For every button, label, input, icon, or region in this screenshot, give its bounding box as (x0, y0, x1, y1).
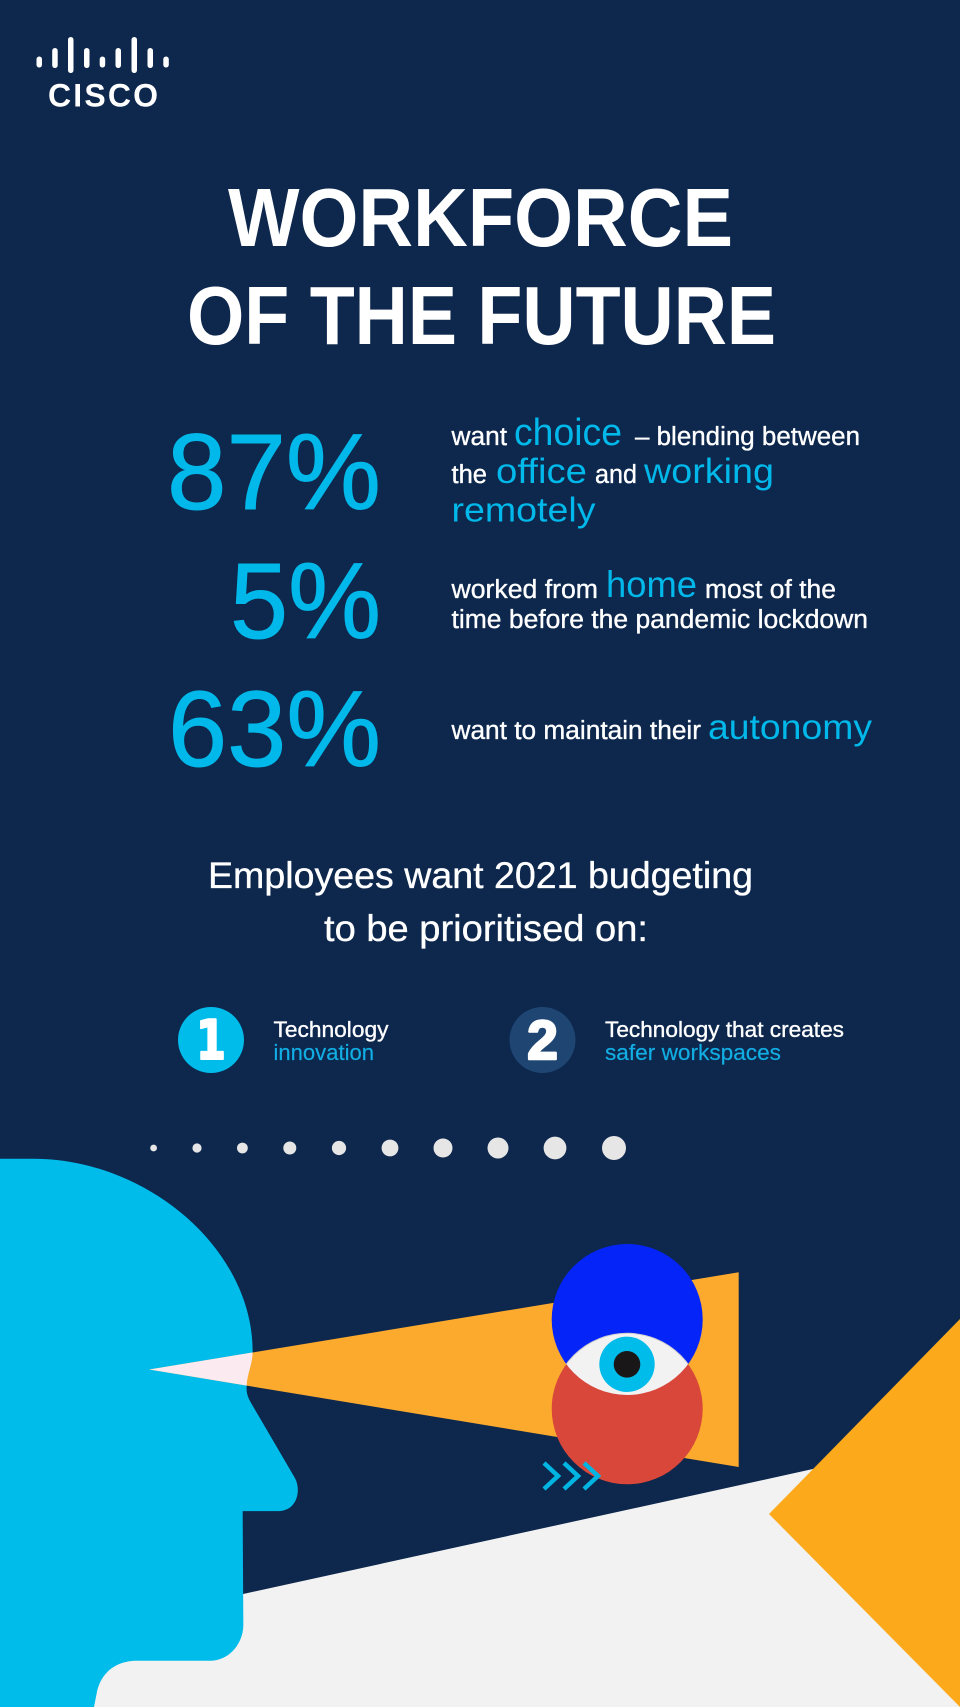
stat text: choice: – blending between (635, 423, 860, 451)
stat text: choice: working (643, 452, 774, 491)
priority 1 text (274, 1017, 389, 1065)
title: WORKFORCE (228, 171, 733, 264)
red circle (552, 1333, 703, 1484)
floor: light grey shape (80, 1436, 960, 1707)
head silhouette (0, 1159, 298, 1707)
stat text: home: most of the (705, 576, 836, 604)
stat text: autonomy (450, 708, 873, 747)
title: OF THE FUTURE (187, 269, 776, 362)
stat text: autonomy: want to maintain their (450, 717, 702, 745)
stat text: choice: the (452, 461, 487, 489)
icon: number 2 badge (510, 1007, 576, 1073)
logo: Cisco: CISCO (48, 78, 158, 114)
stat text: home: worked from (450, 576, 598, 604)
stat number: 87%: 87% (167, 411, 381, 532)
stat: 87 percent (167, 411, 860, 532)
priority 1 text: innovation (274, 1040, 374, 1065)
heading: budgeting priorities: to be prioritised on: (324, 908, 648, 949)
iris (599, 1337, 655, 1392)
heading: budgeting priorities (208, 855, 753, 949)
stat: 5 percent (230, 540, 868, 661)
stat text: home: home (606, 564, 697, 605)
pupil (614, 1351, 640, 1378)
priority 2: safer workspaces (510, 1007, 844, 1073)
eye white (566, 1332, 688, 1395)
icon: number 1 badge (178, 1007, 244, 1073)
stat text: home: time before the pandemic lockdown (452, 606, 868, 634)
stat text: autonomy: autonomy (708, 708, 873, 747)
priority 2 text: Technology that creates (605, 1017, 844, 1042)
blue circle (552, 1244, 703, 1395)
stat text: choice: office (496, 452, 587, 491)
beam of vision (149, 1272, 739, 1467)
priority 1: technology innovation (178, 1007, 389, 1073)
stat text: choice: want (450, 423, 507, 451)
priority 2 text: safer workspaces (605, 1040, 781, 1065)
icon: chevron arrows (544, 1463, 598, 1489)
priority 2 text (605, 1017, 844, 1065)
stat text: choice: choice (514, 412, 622, 454)
icon: number 2 badge: 2 (527, 1009, 558, 1071)
priority 1 text: Technology (274, 1017, 389, 1042)
dotted line of growing dots (150, 1136, 626, 1160)
logo: Cisco (36, 37, 169, 114)
stat number: 63%: 63% (168, 668, 381, 789)
title (187, 171, 776, 362)
heading: budgeting priorities: Employees want 2021 budgeting (208, 855, 753, 896)
eye illustration (552, 1244, 703, 1484)
stat text: choice (450, 412, 860, 530)
stat text: choice: and (595, 461, 637, 489)
stat text: choice: remotely (452, 492, 596, 530)
icon: number 1 badge: 1 (196, 1009, 226, 1072)
orange diamond (769, 1319, 960, 1707)
stat: 63 percent (168, 668, 873, 789)
stat text: home (450, 564, 868, 634)
stat number: 5%: 5% (230, 540, 381, 661)
